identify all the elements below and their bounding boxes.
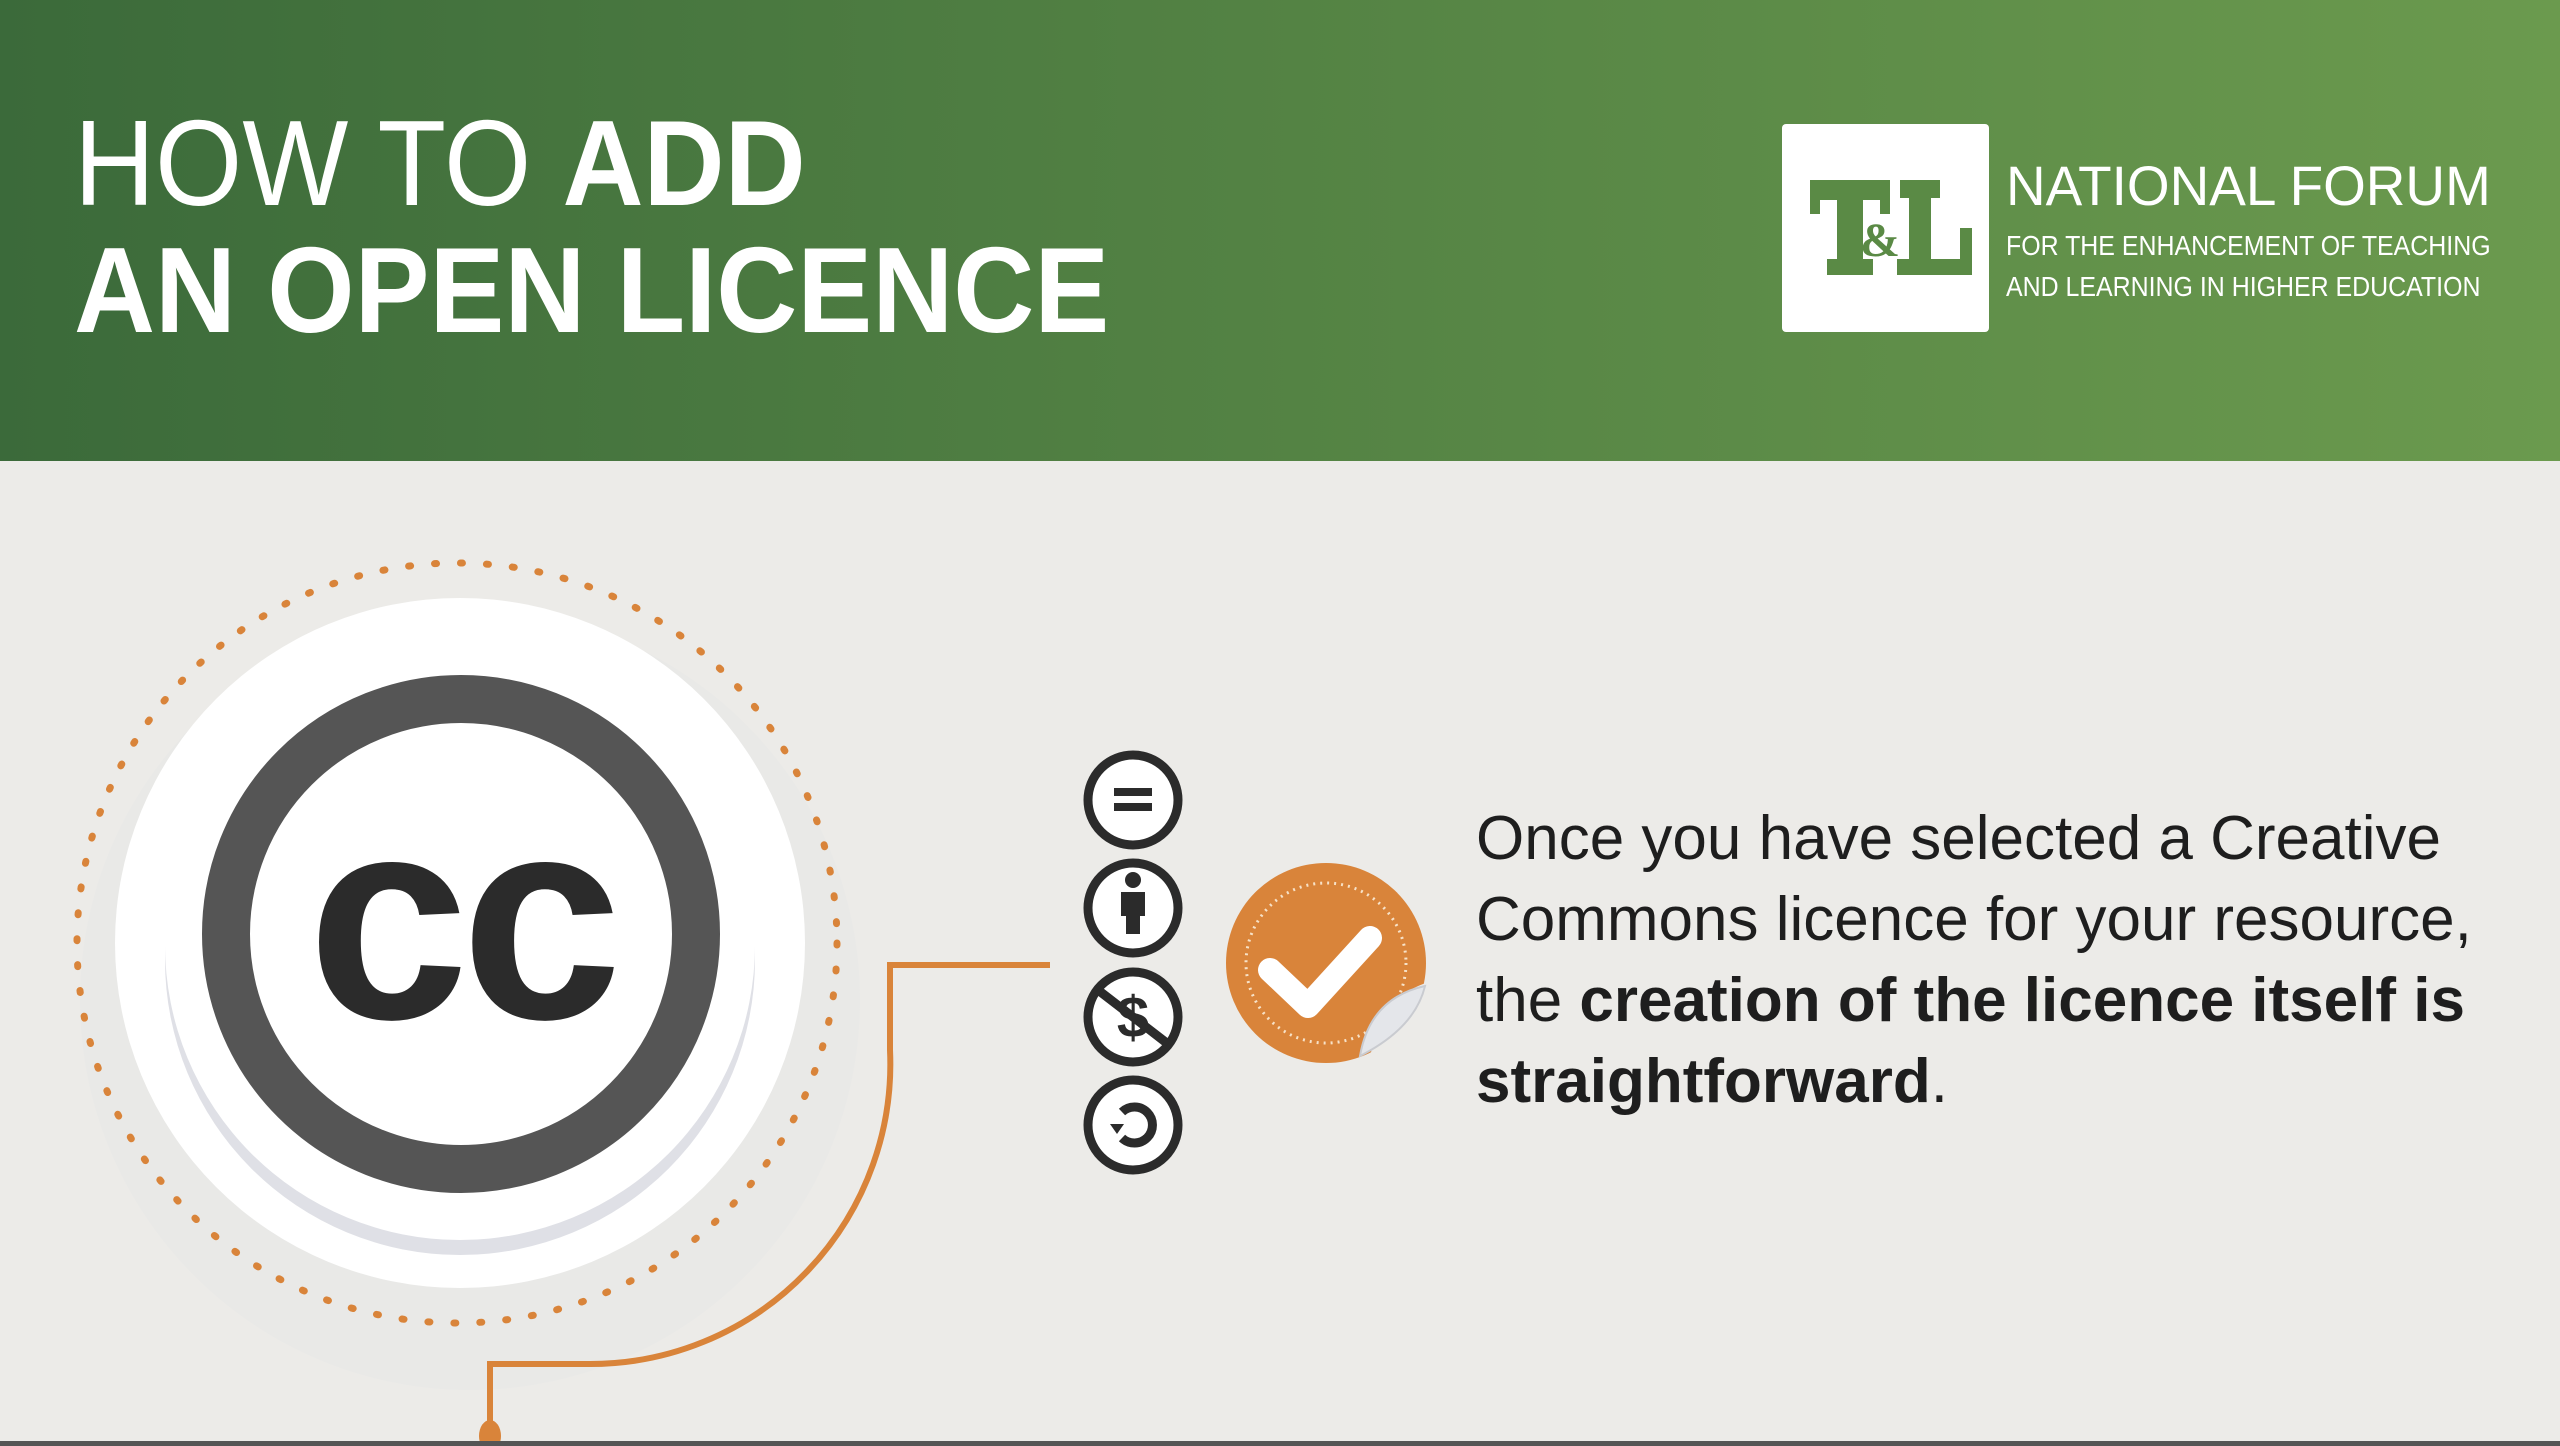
logo text: subtitle: FOR THE ENHANCEMENT OF TEACHING: [2006, 230, 2491, 261]
icon: attribution: [1088, 863, 1178, 953]
text block: Once you have selected a Creative Commons licence for your resource, the creation of the licence itself is straightforward.: [1476, 804, 2472, 1116]
title line 1: HOW TO ADD: [74, 95, 806, 231]
icon: no derivatives: [1088, 755, 1178, 845]
icons: licence symbols: [1084, 750, 1182, 1174]
icon: share alike: [1088, 1080, 1178, 1170]
title line 2: AN OPEN LICENCE: [74, 222, 1109, 358]
dotted ring: [77, 563, 837, 1323]
logo text: subtitle: [2006, 230, 2491, 302]
cc logo: [226, 699, 696, 1169]
icon: non commercial: [1088, 972, 1178, 1062]
connector line: [490, 965, 1050, 1430]
logo text: subtitle: AND LEARNING IN HIGHER EDUCATION: [2006, 271, 2480, 302]
icon: non commercial: $: [1117, 985, 1149, 1050]
icon: check sticker: [1226, 863, 1426, 1063]
cc logo: cc: [308, 756, 615, 1080]
logo text: national forum: NATIONAL FORUM: [2006, 154, 2491, 217]
logo: T&L: [1782, 124, 1989, 332]
shadow: [80, 610, 860, 1390]
white disc: [115, 598, 805, 1288]
CC graphic with connector: [74, 560, 1050, 1441]
logo: T&L: &: [1860, 214, 1900, 267]
header band: [0, 0, 2560, 461]
